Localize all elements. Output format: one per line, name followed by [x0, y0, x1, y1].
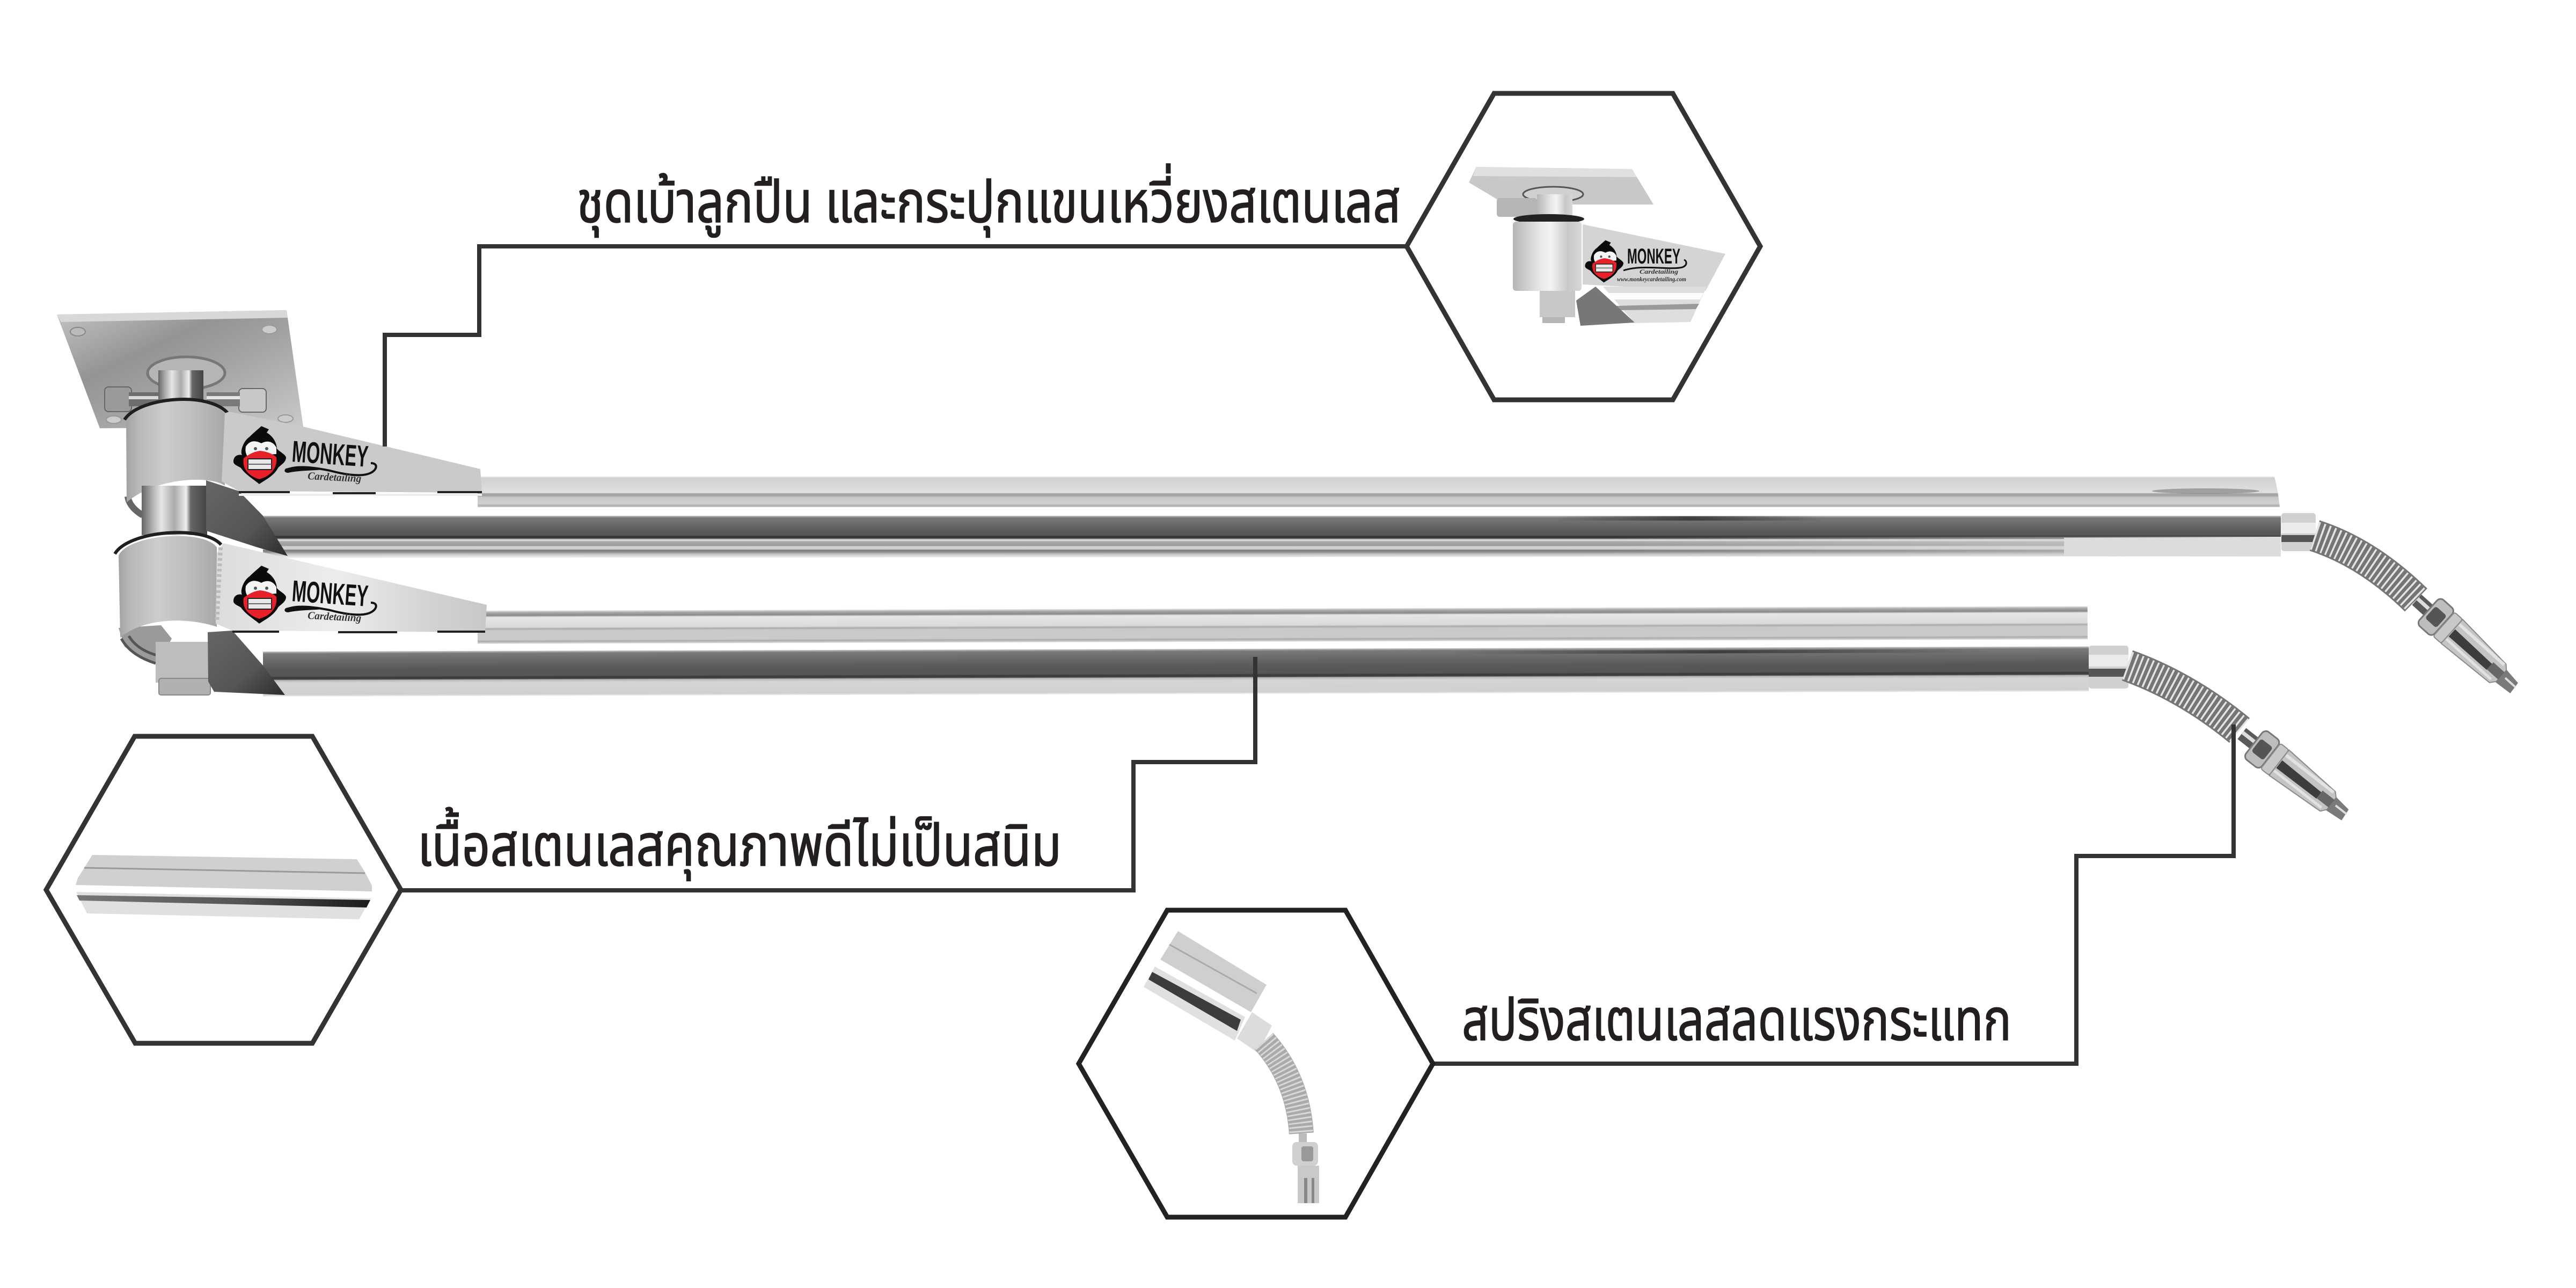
lower fitting: [2231, 720, 2357, 829]
hex detail: tube crease: [84, 868, 365, 873]
hex detail: cylinder: [1513, 222, 1582, 291]
upper bracket: [222, 412, 482, 496]
hex detail: dark reflection: [77, 895, 370, 908]
upper tube: polished lower half: [263, 516, 2281, 558]
upper logo: monkey: [233, 426, 286, 484]
hex detail: nut: [1542, 317, 1565, 323]
hex detail: dark reflection: [1148, 972, 1241, 1031]
connector: tube callout: [401, 657, 1255, 890]
upper spring: [2315, 536, 2416, 600]
hex detail: tube lower: [1144, 967, 1245, 1041]
heading: stainless body: เนื้อสเตนเลสคุณภาพดีไม่เป็นสนิม: [418, 804, 1062, 892]
hex detail: wordmark: Cardetailing: [1640, 268, 1678, 275]
upper collar: [2281, 513, 2316, 551]
hexagon callout: spring: [1079, 910, 1433, 1217]
lower bearing rings: [119, 625, 172, 663]
upper logo: wordmark: MONKEY: [291, 434, 369, 473]
mounting plate: [57, 310, 303, 428]
hex detail: plate: [1469, 167, 1653, 204]
hex detail: wordmark: MONKEY: [1627, 245, 1680, 268]
hex detail: wordmark: www.monkeycardetailing.com: [1617, 275, 1686, 283]
hex detail: ring: [1513, 214, 1584, 224]
hex detail: collar: [1237, 1012, 1272, 1053]
hex detail: white band: [1607, 293, 1703, 299]
lower bolt: [156, 642, 210, 695]
connector: spring callout: [1433, 724, 2234, 1064]
lower tube: polished lower half: [263, 646, 2089, 697]
upper logo: wordmark: [284, 434, 376, 485]
hex detail: lower tube stub: [1603, 287, 1707, 323]
hex detail: tube lower part: [76, 892, 371, 919]
hex detail: bracket: [1583, 224, 1725, 291]
hex detail: flange: [1523, 187, 1583, 202]
lower tube: top shell: [478, 606, 2088, 644]
hexagon callout: stainless tube: [46, 736, 401, 1043]
hex detail: wordmark: [1617, 245, 1686, 283]
upper tube: top shell: [478, 477, 2280, 507]
pivot shaft between arms: [142, 486, 207, 535]
product: swing arm assembly: [57, 310, 2527, 829]
lower bracket: [216, 543, 487, 632]
lower logo: wordmark: Cardetailing: [308, 610, 362, 624]
upper dark gusset: [206, 480, 288, 556]
bolts and top shaft: [105, 370, 266, 412]
hex detail: tube top shell: [1160, 931, 1267, 1012]
upper logo: wordmark: Cardetailing: [308, 470, 362, 485]
hex detail: gusset: [1576, 287, 1635, 326]
hex detail: tube crease: [1169, 945, 1257, 993]
upper fitting: [2405, 587, 2527, 701]
lower logo: wordmark: MONKEY: [291, 574, 369, 613]
hex detail: shaft: [1537, 194, 1572, 217]
hex detail: spring: [1264, 1041, 1301, 1133]
lower logo: wordmark: [284, 574, 376, 624]
upper cylinder bearing rings: [128, 496, 143, 515]
hex detail: plate highlight: [1473, 167, 1637, 177]
hex detail: bolt head: [1540, 291, 1575, 317]
hex detail: fitting: [1292, 1133, 1319, 1203]
heading: spring: สปริงสเตนเลสลดแรงกระแทก: [1462, 978, 2011, 1066]
lower dark gusset: [208, 631, 285, 695]
hex detail: monkey: [1585, 240, 1623, 282]
hex detail: tube band: [1615, 304, 1699, 310]
lower spring: [2127, 665, 2240, 730]
lower cylinder: [115, 532, 221, 638]
lower logo: monkey: [233, 566, 286, 624]
lower collar: [2089, 646, 2128, 689]
hexagon callout: bearing housing: [1407, 93, 1760, 400]
hex detail: bolt: [1497, 198, 1537, 217]
connector: bearing callout: [385, 246, 1408, 447]
upper cylinder: [125, 399, 230, 502]
heading: bearing housing: ชุดเบ้าลูกปืน และกระปุกแขนเหวี่ยงสเตนเลส: [577, 160, 1401, 248]
hex detail: tube top shell: [76, 855, 372, 891]
